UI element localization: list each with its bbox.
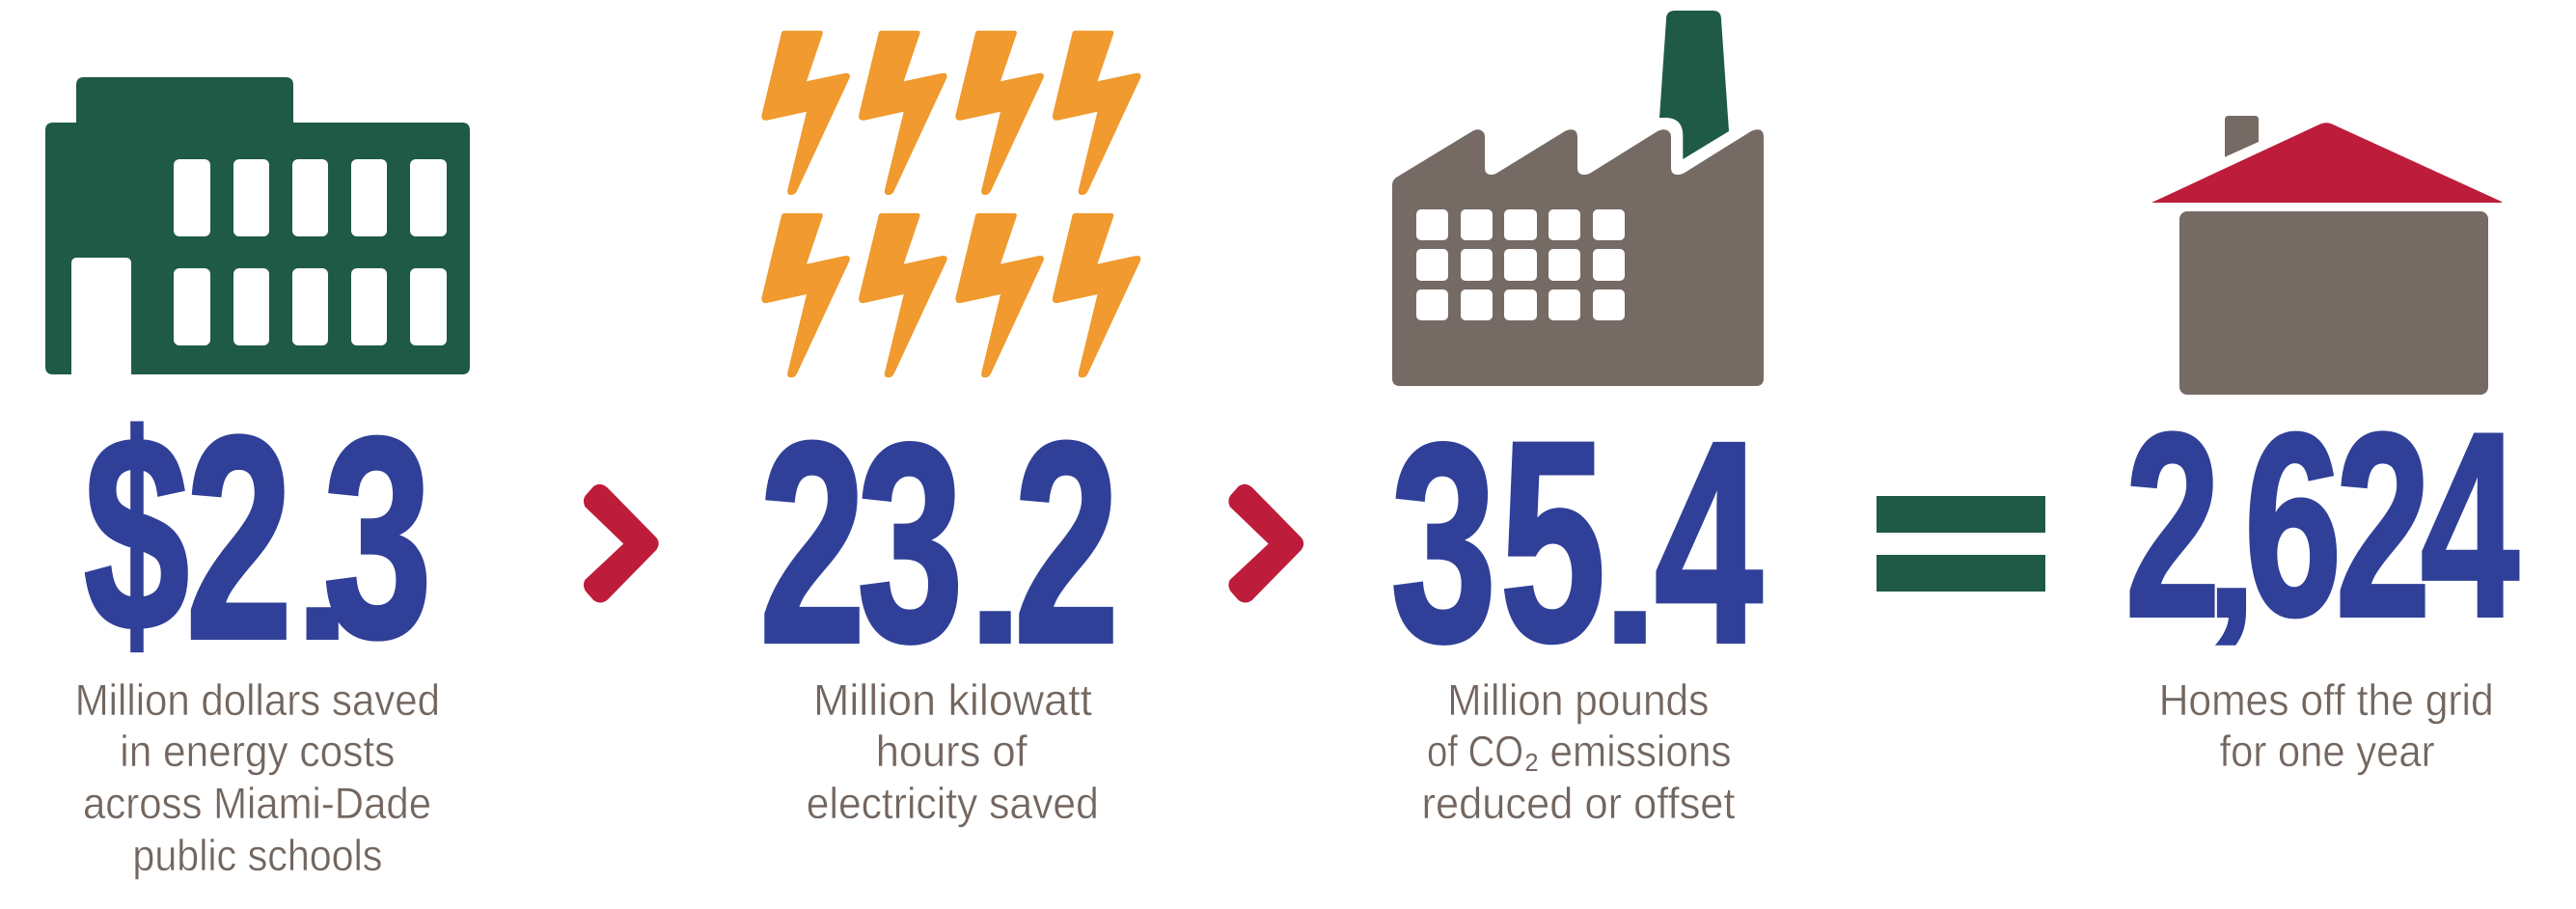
icon: school building	[45, 77, 470, 374]
statistic: 23.2: 3	[857, 385, 964, 700]
caption: CO2 reduced: Million pounds	[1447, 675, 1709, 725]
icon: factory	[1392, 11, 1764, 386]
statistic: 23.2	[759, 384, 1119, 702]
statistic: 23.2: 2	[1014, 384, 1119, 702]
statistic: 35.4: 4	[1655, 381, 1763, 702]
statistic: 2,624: 6	[2244, 379, 2342, 670]
caption: dollars saved: in energy costs	[120, 727, 395, 776]
caption: dollars saved: across Miami-Dade	[83, 779, 431, 828]
caption: kilowatt hours saved	[807, 675, 1099, 828]
caption: CO2 reduced: 2	[1524, 748, 1538, 777]
statistic: 2,624: 2	[2336, 379, 2430, 672]
statistic: 23.2: 2	[759, 384, 865, 702]
statistic: 2,624: 4	[2421, 379, 2519, 672]
caption: homes off the grid: for one year	[2219, 727, 2435, 776]
statistic: $2.3: 3	[323, 378, 432, 697]
caption: dollars saved: Million dollars saved	[75, 675, 440, 725]
caption: kilowatt hours saved: electricity saved	[807, 779, 1099, 828]
statistic: 35.4: .	[1603, 463, 1658, 684]
statistic: 2,624: ,	[2206, 454, 2257, 655]
statistic: 2,624: 2	[2125, 379, 2220, 672]
statistic: $2.3	[84, 376, 432, 699]
statistic: 35.4: 3	[1391, 385, 1496, 700]
caption: kilowatt hours saved: Million kilowatt	[813, 675, 1092, 725]
caption: homes off the grid	[2159, 675, 2494, 776]
statistic: $2.3: .	[294, 459, 351, 681]
caption: CO2 reduced: reduced or offset	[1422, 779, 1736, 828]
operator: greater than	[1228, 484, 1303, 602]
statistic: 35.4: 5	[1500, 383, 1605, 702]
caption: kilowatt hours saved: hours of	[876, 727, 1028, 776]
operator: greater than	[584, 484, 659, 602]
caption: dollars saved	[75, 675, 440, 880]
caption: CO2 reduced	[1422, 675, 1736, 828]
statistic: 35.4	[1391, 381, 1763, 702]
statistic: $2.3: 2	[185, 376, 292, 699]
caption: homes off the grid: Homes off the grid	[2159, 675, 2494, 725]
statistic: $2.3: $	[84, 379, 189, 689]
operator: equals	[1877, 496, 2045, 592]
caption: CO2 reduced: emissions	[1549, 727, 1731, 776]
statistic: 23.2: .	[968, 464, 1023, 684]
caption: dollars saved: public schools	[132, 831, 382, 880]
icon: eight lightning bolts	[761, 31, 1140, 377]
icon: house	[2151, 116, 2502, 395]
statistic: 2,624	[2125, 379, 2519, 672]
caption: CO2 reduced: of CO	[1427, 727, 1523, 776]
